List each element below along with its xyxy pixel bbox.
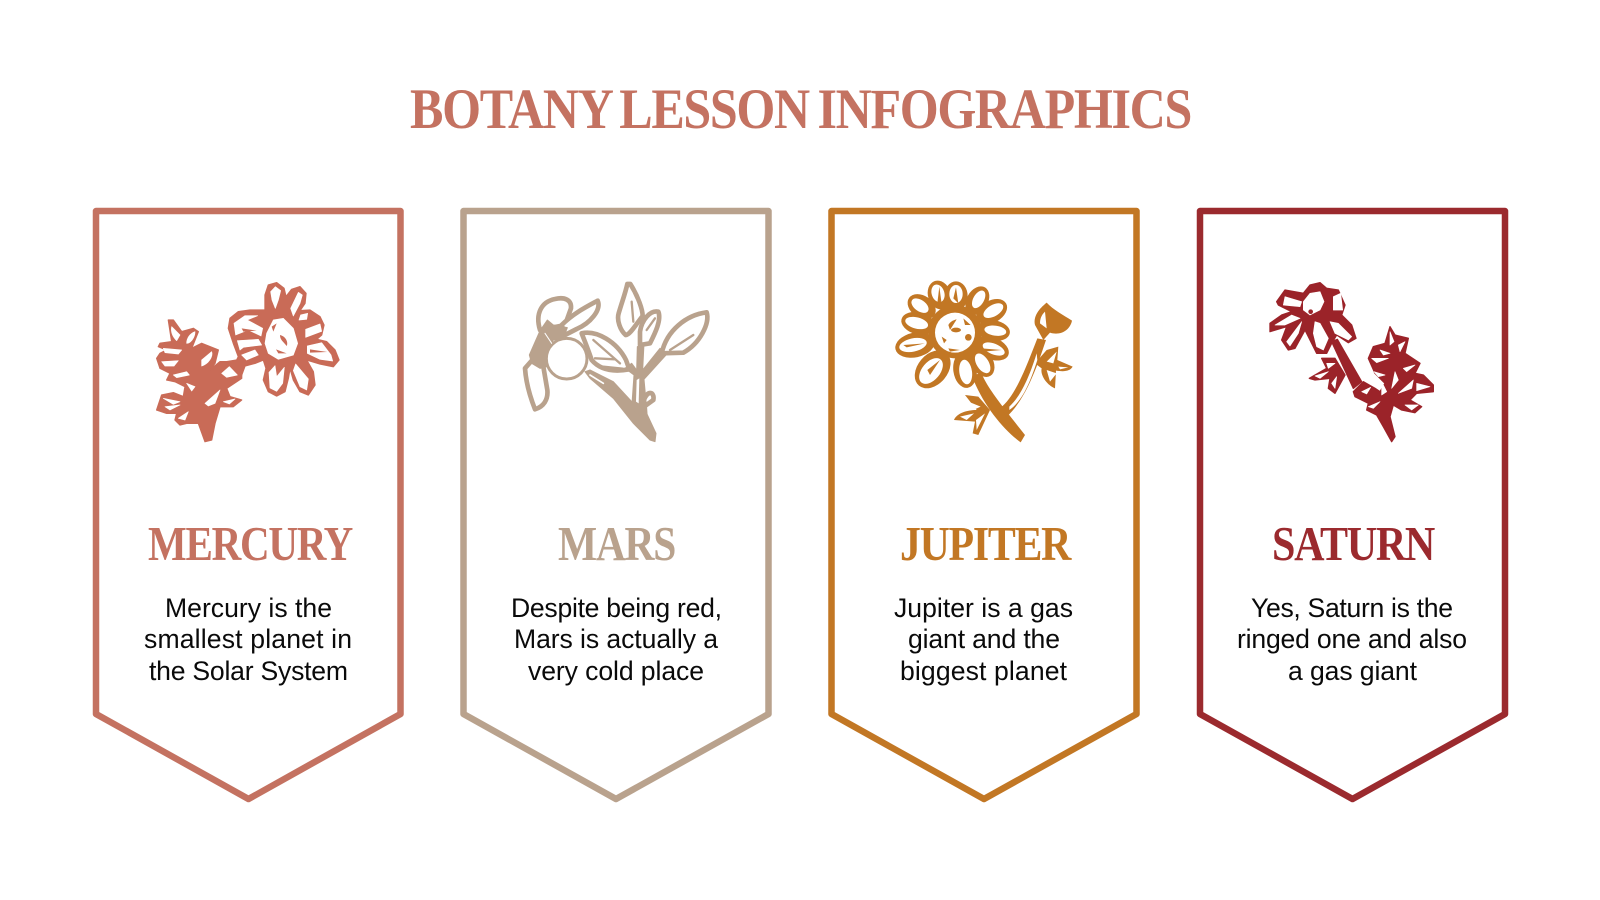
description: Mercury: the Solar System bbox=[149, 656, 348, 686]
icon: daisy with bud bbox=[893, 278, 1073, 442]
description: Jupiter: giant and the bbox=[908, 624, 1060, 654]
icon: drooping daisy with leafy sprig bbox=[1270, 283, 1433, 442]
icon: flower with buds and leaves bbox=[525, 284, 707, 442]
description: Mercury bbox=[144, 593, 352, 686]
banner outline: Mercury bbox=[96, 211, 400, 799]
banner outline: Saturn bbox=[1200, 211, 1505, 799]
description: Mars: very cold place bbox=[528, 656, 704, 686]
description: Jupiter: Jupiter is a gas bbox=[894, 593, 1073, 623]
heading: Saturn: SATURN bbox=[1272, 518, 1435, 571]
panel: Saturn bbox=[1200, 211, 1505, 799]
icon: daisy with leafy sprig bbox=[157, 283, 339, 442]
description: Mars: Mars is actually a bbox=[514, 624, 718, 654]
description: Mars: Despite being red, bbox=[511, 593, 722, 623]
panel: Mercury bbox=[96, 211, 400, 799]
description: Saturn: ringed one and also bbox=[1237, 624, 1467, 654]
description: Saturn: a gas giant bbox=[1288, 656, 1418, 686]
heading: Mars: MARS bbox=[558, 518, 675, 571]
heading: Mercury: MERCURY bbox=[148, 518, 353, 571]
description: Mercury: smallest planet in bbox=[144, 624, 352, 654]
heading: Jupiter: JUPITER bbox=[900, 518, 1072, 571]
description: Saturn: Yes, Saturn is the bbox=[1251, 593, 1453, 623]
description: Jupiter bbox=[894, 593, 1073, 686]
banner outline: Mars bbox=[464, 211, 768, 799]
description: Saturn bbox=[1237, 593, 1467, 686]
banner outline: Jupiter bbox=[832, 211, 1136, 799]
title: BOTANY LESSON INFOGRAPHICS bbox=[410, 78, 1191, 141]
description: Mars bbox=[511, 593, 722, 686]
panel: Mars bbox=[464, 211, 768, 799]
description: Mercury: Mercury is the bbox=[165, 593, 332, 623]
panel: Jupiter bbox=[832, 211, 1136, 799]
description: Jupiter: biggest planet bbox=[900, 656, 1068, 686]
